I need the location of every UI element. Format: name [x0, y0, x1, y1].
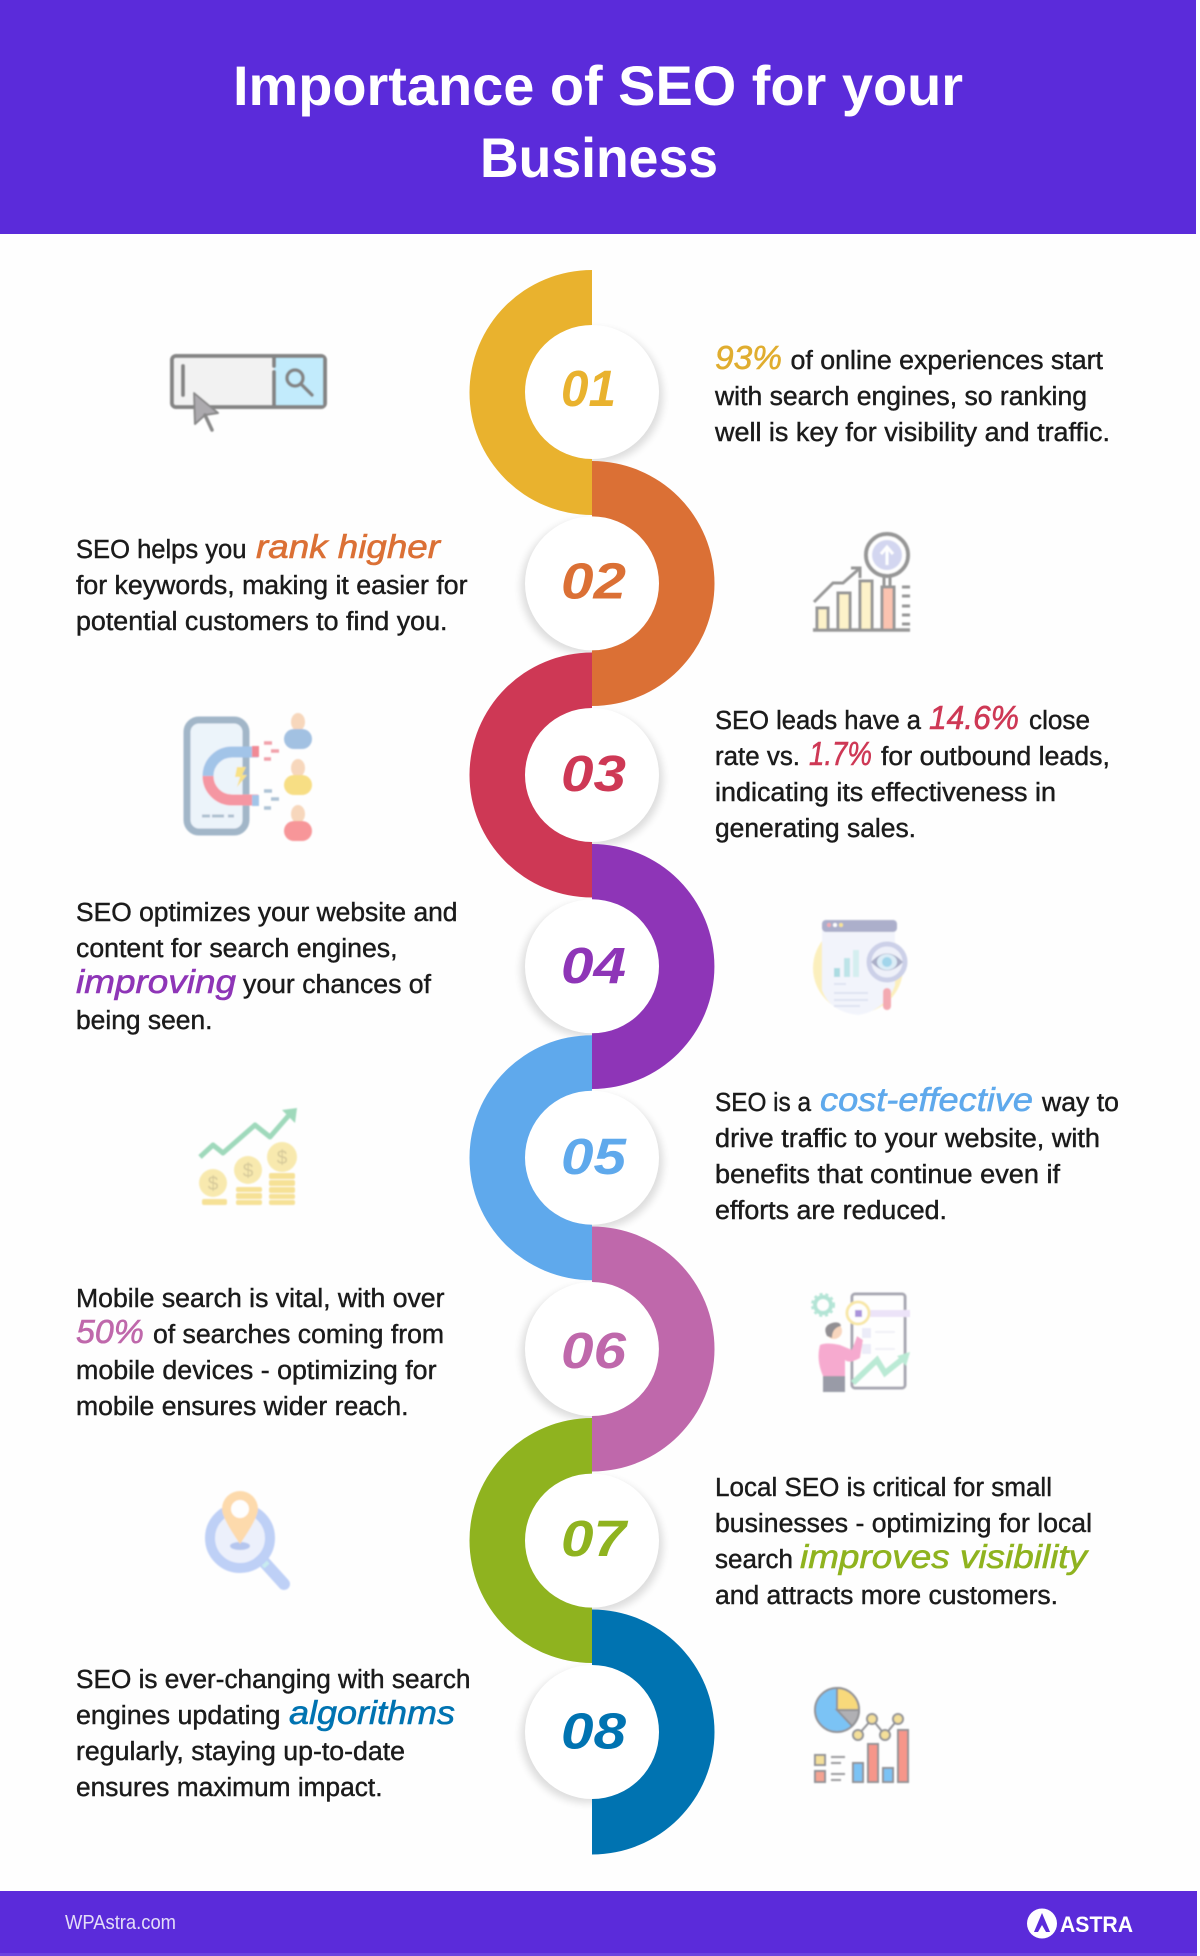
text block 03: SEO leads have a: [715, 707, 922, 735]
text block 03: generating sales.: [715, 815, 916, 843]
icon: person with phone and chart: [812, 1294, 910, 1392]
text block 02: potential customers to find you.: [76, 608, 448, 636]
text block 02: for keywords, making it easier for: [76, 572, 468, 600]
icon: pie chart and bar graph: [815, 1688, 908, 1782]
text block 05: cost-effective: [820, 1081, 1033, 1118]
text block 08: regularly, staying up-to-date: [76, 1738, 405, 1766]
text block 03: [715, 699, 1110, 843]
text block 04: improving: [76, 963, 237, 1000]
text block 05: SEO is a: [715, 1089, 812, 1117]
text block 07: [715, 1474, 1092, 1610]
text block 02: rank higher: [256, 528, 442, 565]
text block 03: for outbound leads,: [881, 743, 1110, 771]
text block 03: rate vs.: [715, 743, 800, 771]
number 02: 02: [561, 552, 626, 610]
text block 01: of online experiences start: [790, 347, 1103, 375]
text block 06: mobile devices - optimizing for: [76, 1357, 437, 1385]
footer bar: [0, 1891, 1197, 1956]
arc 04: [592, 844, 714, 1089]
icon: coins with rising arrow: [199, 1108, 297, 1205]
text block 04: content for search engines,: [76, 935, 398, 963]
arc 01: [470, 270, 592, 515]
text block 06: [76, 1285, 445, 1421]
icon: map pin in magnifier: [210, 1491, 284, 1584]
Astra logo: [1027, 1908, 1133, 1938]
arc 03: [470, 652, 592, 898]
title: Business: [480, 126, 718, 189]
text block 06: Mobile search is vital, with over: [76, 1285, 445, 1313]
serpentine spine: [470, 270, 714, 1854]
icon: growth chart with magnifier: [813, 534, 910, 630]
text block 07: and attracts more customers.: [715, 1582, 1058, 1610]
text block 06: 50%: [76, 1313, 144, 1350]
arc 02: [592, 461, 714, 706]
text block 03: close: [1029, 707, 1090, 735]
text block 04: SEO optimizes your website and: [76, 899, 457, 927]
footer site name: WPAstra.com: [65, 1912, 176, 1934]
title: Importance of SEO for your: [233, 54, 963, 117]
icon: phone magnet attracting people: [187, 713, 312, 841]
text block 02: [76, 528, 468, 636]
number 04: 04: [561, 937, 626, 994]
number 01: 01: [561, 360, 616, 417]
text block 08: ensures maximum impact.: [76, 1774, 382, 1802]
title: [233, 54, 963, 189]
number 05: 05: [561, 1128, 627, 1185]
text block 08: algorithms: [289, 1694, 455, 1731]
text block 04: your chances of: [243, 971, 432, 999]
text block 03: 14.6%: [929, 699, 1019, 736]
text block 04: [76, 899, 457, 1035]
circle shadows: [521, 329, 663, 1803]
text block 08: [76, 1666, 471, 1802]
text block 01: [714, 339, 1110, 447]
number 06: 06: [561, 1322, 627, 1379]
Astra logo: ASTRA: [1060, 1912, 1133, 1937]
arc 06: [592, 1226, 714, 1472]
text block 03: 1.7%: [809, 735, 872, 772]
icon: coins with rising arrow: $: [277, 1148, 288, 1169]
text block 08: SEO is ever-changing with search: [76, 1666, 471, 1694]
arc 08: [592, 1610, 714, 1854]
text block 01: well is key for visibility and traffic.: [714, 419, 1110, 447]
arc 07: [470, 1418, 592, 1663]
text block 07: Local SEO is critical for small: [715, 1474, 1052, 1502]
step numbers: [561, 360, 629, 1760]
text block 01: 93%: [715, 339, 782, 376]
text block 06: of searches coming from: [153, 1321, 444, 1349]
white number circles: [525, 325, 659, 1799]
text block 07: search: [715, 1546, 793, 1574]
text block 08: engines updating: [76, 1702, 280, 1730]
text block 05: drive traffic to your website, with: [715, 1125, 1100, 1153]
text block 01: with search engines, so ranking: [714, 383, 1087, 411]
text block 05: way to: [1041, 1089, 1119, 1117]
text block 05: benefits that continue even if: [715, 1161, 1061, 1189]
icon: search bar with cursor: [172, 356, 325, 430]
text block 05: [715, 1081, 1119, 1225]
text block 07: businesses - optimizing for local: [715, 1510, 1092, 1538]
icon: coins with rising arrow: $: [208, 1174, 219, 1195]
number 08: 08: [561, 1702, 627, 1760]
number 03: 03: [561, 745, 626, 802]
text block 03: indicating its effectiveness in: [715, 779, 1056, 807]
text block 06: mobile ensures wider reach.: [76, 1393, 408, 1421]
icon: coins with rising arrow: $: [243, 1161, 254, 1182]
text block 04: being seen.: [76, 1007, 212, 1035]
header banner: [0, 0, 1196, 234]
text block 07: improves visibility: [800, 1538, 1090, 1575]
text block 02: SEO helps you: [76, 536, 246, 564]
arc 05: [470, 1035, 592, 1280]
text block 05: efforts are reduced.: [715, 1197, 947, 1225]
icon: browser window with eye magnifier: [813, 920, 905, 1015]
number 07: 07: [561, 1510, 629, 1567]
